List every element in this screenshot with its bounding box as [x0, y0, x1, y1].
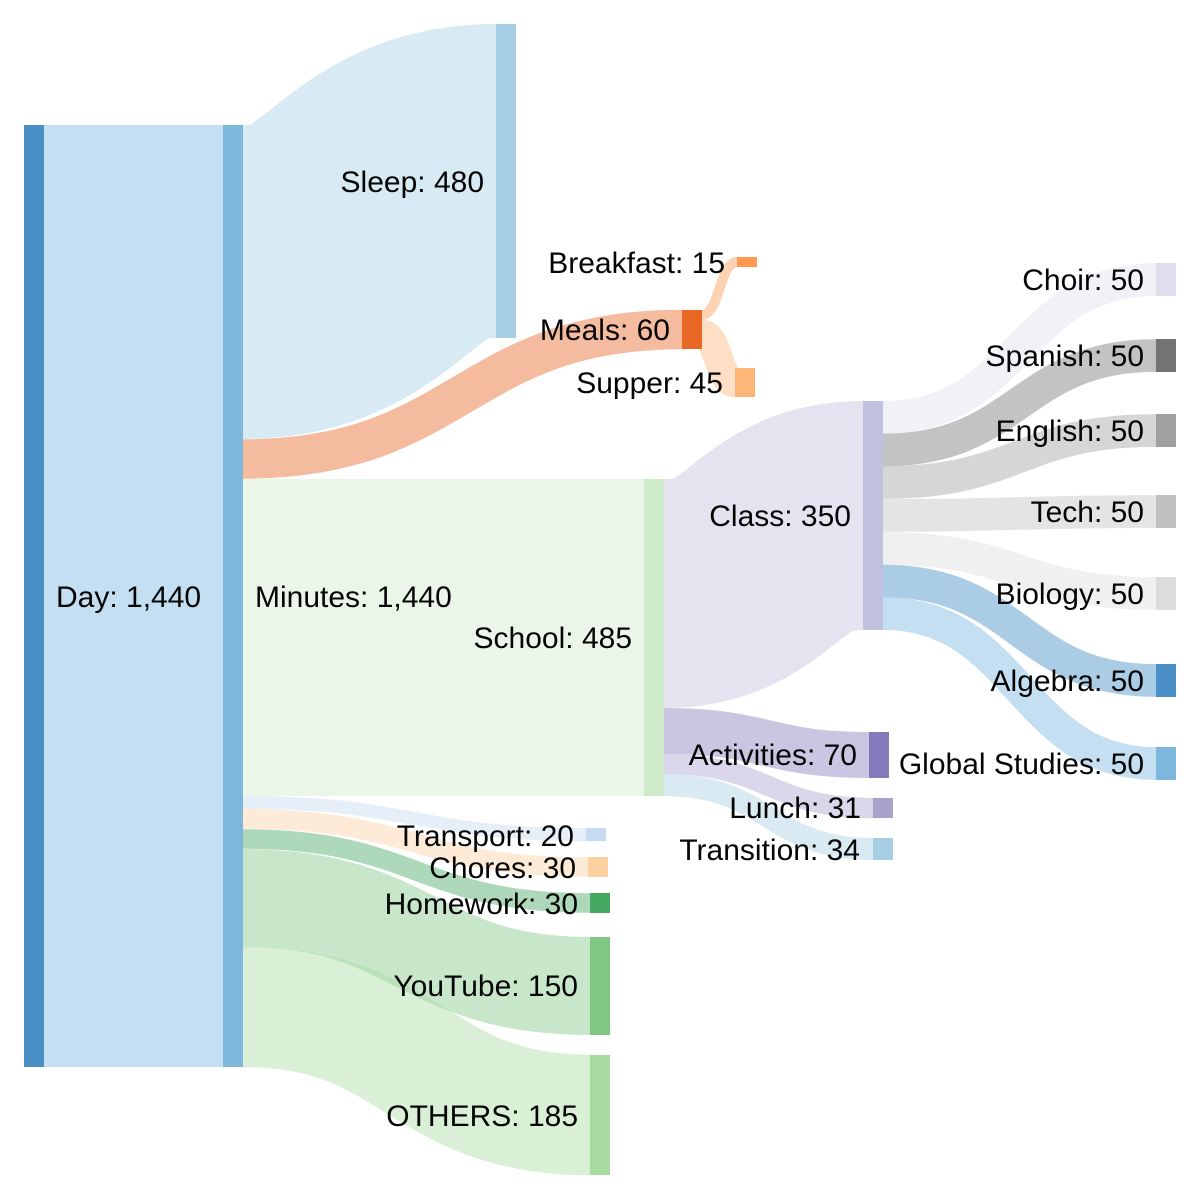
node: Transition [873, 838, 893, 860]
node: English [1156, 414, 1176, 447]
node: Lunch [873, 798, 893, 818]
node: Choir [1156, 263, 1176, 296]
link: Day to Minutes [44, 125, 223, 1067]
sankey links [44, 181, 1156, 1115]
link: School to Activities [664, 731, 869, 755]
link: Minutes to Meals [243, 330, 682, 459]
link: Class to Choir [883, 280, 1156, 418]
link: Minutes to Homework [243, 839, 590, 903]
label: Transition: Transition: 34 [679, 834, 860, 867]
link: Minutes to Chores [243, 819, 588, 867]
node: Spanish [1156, 339, 1176, 372]
label: Meals: Meals: 60 [540, 314, 670, 347]
label: Class: Class: 350 [709, 500, 851, 533]
label: Chores: Chores: 30 [429, 852, 576, 885]
label: YouTube: YouTube: 150 [393, 970, 578, 1003]
link: Class to Biology [883, 548, 1156, 594]
link: Minutes to YouTube [243, 898, 590, 986]
link: Minutes to School [243, 479, 644, 796]
node: Minutes [223, 125, 243, 1067]
label: Transport: Transport: 20 [397, 820, 574, 853]
node: Homework [590, 893, 610, 913]
node: School [644, 479, 664, 796]
label: English: English: 50 [996, 415, 1144, 448]
node: Class [863, 401, 883, 630]
label: Choir: Choir: 50 [1022, 264, 1144, 297]
link: Class to English [883, 430, 1156, 482]
link: School to Class [664, 516, 863, 594]
node: OTHERS [590, 1055, 610, 1175]
node: Meals [682, 310, 702, 349]
node: Supper [735, 368, 755, 397]
label: Spanish: Spanish: 50 [986, 340, 1144, 373]
label: Lunch: Lunch: 31 [729, 792, 861, 825]
node: Global Studies [1156, 747, 1176, 780]
link: School to Lunch [664, 764, 873, 808]
node: Biology [1156, 577, 1176, 610]
label: Breakfast: Breakfast: 15 [548, 247, 725, 280]
node: Activities [869, 732, 889, 778]
link: Class to Tech [883, 512, 1156, 516]
label: Homework: Homework: 30 [385, 888, 578, 921]
link: Class to Global Studies [883, 614, 1156, 764]
link: Class to Algebra [883, 581, 1156, 680]
link: Meals to Supper [702, 334, 735, 382]
node: Chores [588, 857, 608, 877]
label: Sleep: Sleep: 480 [341, 166, 484, 199]
node: Sleep [496, 24, 516, 338]
link: Meals to Breakfast [702, 262, 737, 315]
link: School to Transition [664, 785, 873, 849]
label: Minutes: Minutes: 1,440 [255, 581, 452, 614]
link: Minutes to OTHERS [243, 1007, 590, 1115]
sankey labels [56, 166, 1144, 1133]
node: Transport [586, 828, 606, 841]
label: Algebra: Algebra: 50 [991, 665, 1144, 698]
label: Tech: Tech: 50 [1031, 496, 1144, 529]
link: Minutes to Transport [243, 802, 586, 834]
label: Activities: Activities: 70 [689, 739, 857, 772]
link: Minutes to Sleep [243, 181, 496, 282]
link: Class to Spanish [883, 356, 1156, 450]
label: OTHERS: OTHERS: 185 [386, 1100, 578, 1133]
label: Supper: Supper: 45 [576, 367, 723, 400]
label: Global Studies: Global Studies: 50 [899, 748, 1144, 781]
label: School: School: 485 [474, 622, 632, 655]
node: Day [24, 125, 44, 1067]
node: YouTube [590, 937, 610, 1035]
label: Day: Day: 1,440 [56, 581, 201, 614]
node: Tech [1156, 495, 1176, 528]
node: Breakfast [737, 257, 757, 267]
node: Algebra [1156, 664, 1176, 697]
label: Biology: Biology: 50 [996, 578, 1144, 611]
